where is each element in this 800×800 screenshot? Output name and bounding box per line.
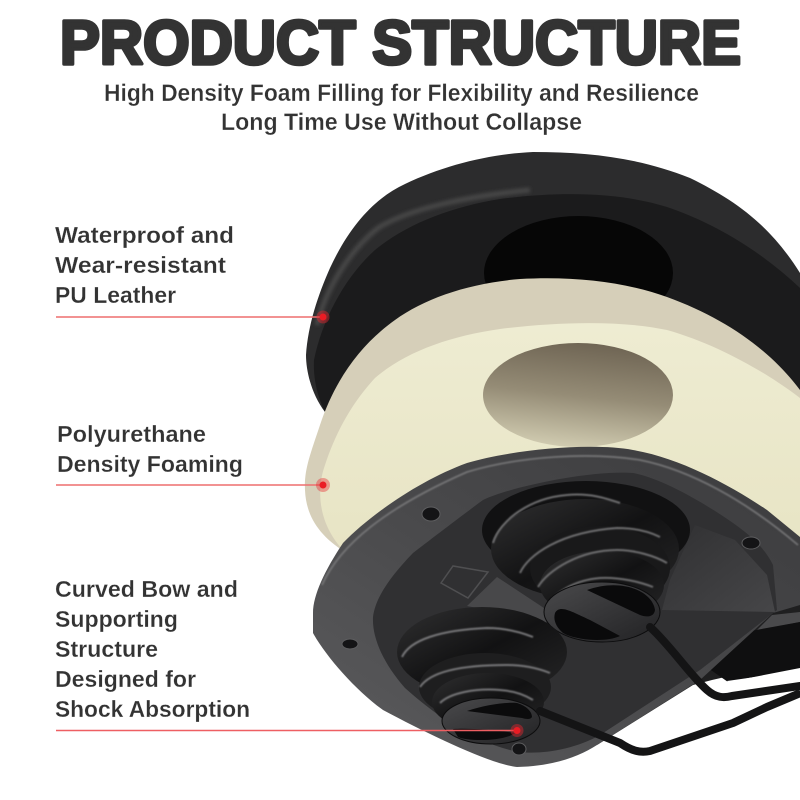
embossed logo: [441, 566, 488, 598]
callout: curved bow structure: [55, 576, 524, 737]
callout: polyurethane foam: [56, 421, 330, 492]
frame gaps showing background: [620, 673, 800, 800]
callout: PU leather: Wear-resistant: [55, 252, 226, 278]
subtitle: High Density Foam Filling for Flexibility and Resilience: [104, 80, 699, 107]
callout: curved bow structure: Structure: [55, 636, 158, 662]
upper spring mount: [482, 481, 690, 642]
rail teeth: [662, 612, 800, 642]
title: PRODUCT STRUCTURE: [60, 9, 741, 78]
callout: curved bow structure: Shock Absorption: [55, 696, 250, 722]
right plate wedge: [662, 525, 775, 612]
callout: curved bow structure: Designed for: [55, 666, 196, 692]
cream polyurethane foam layer: [305, 278, 800, 640]
mounting screws: [342, 507, 760, 755]
lower mount highlights: [402, 628, 550, 703]
curved bow base plate: [313, 447, 800, 767]
callout: curved bow structure: Supporting: [55, 606, 178, 632]
lower spring mount: [397, 607, 567, 744]
callout: PU leather: PU Leather: [55, 282, 176, 308]
steel wire bows: [540, 627, 800, 752]
black PU leather cushion layer: [306, 152, 800, 500]
upper mount highlights: [493, 495, 667, 607]
foam centre hole: [483, 343, 673, 447]
callout: polyurethane foam: Density Foaming: [57, 451, 243, 477]
lit connector strip: [467, 577, 550, 625]
callout: PU leather: [55, 222, 330, 324]
callout: polyurethane foam: Polyurethane: [57, 421, 206, 447]
callout: PU leather: Waterproof and: [55, 222, 234, 248]
subtitle: Long Time Use Without Collapse: [221, 109, 582, 136]
callout: curved bow structure: Curved Bow and: [55, 576, 238, 602]
rear frame and rails: [597, 530, 800, 745]
exploded product illustration: [305, 152, 800, 800]
subtitle: [104, 80, 699, 136]
cushion centre hole: [484, 216, 673, 330]
